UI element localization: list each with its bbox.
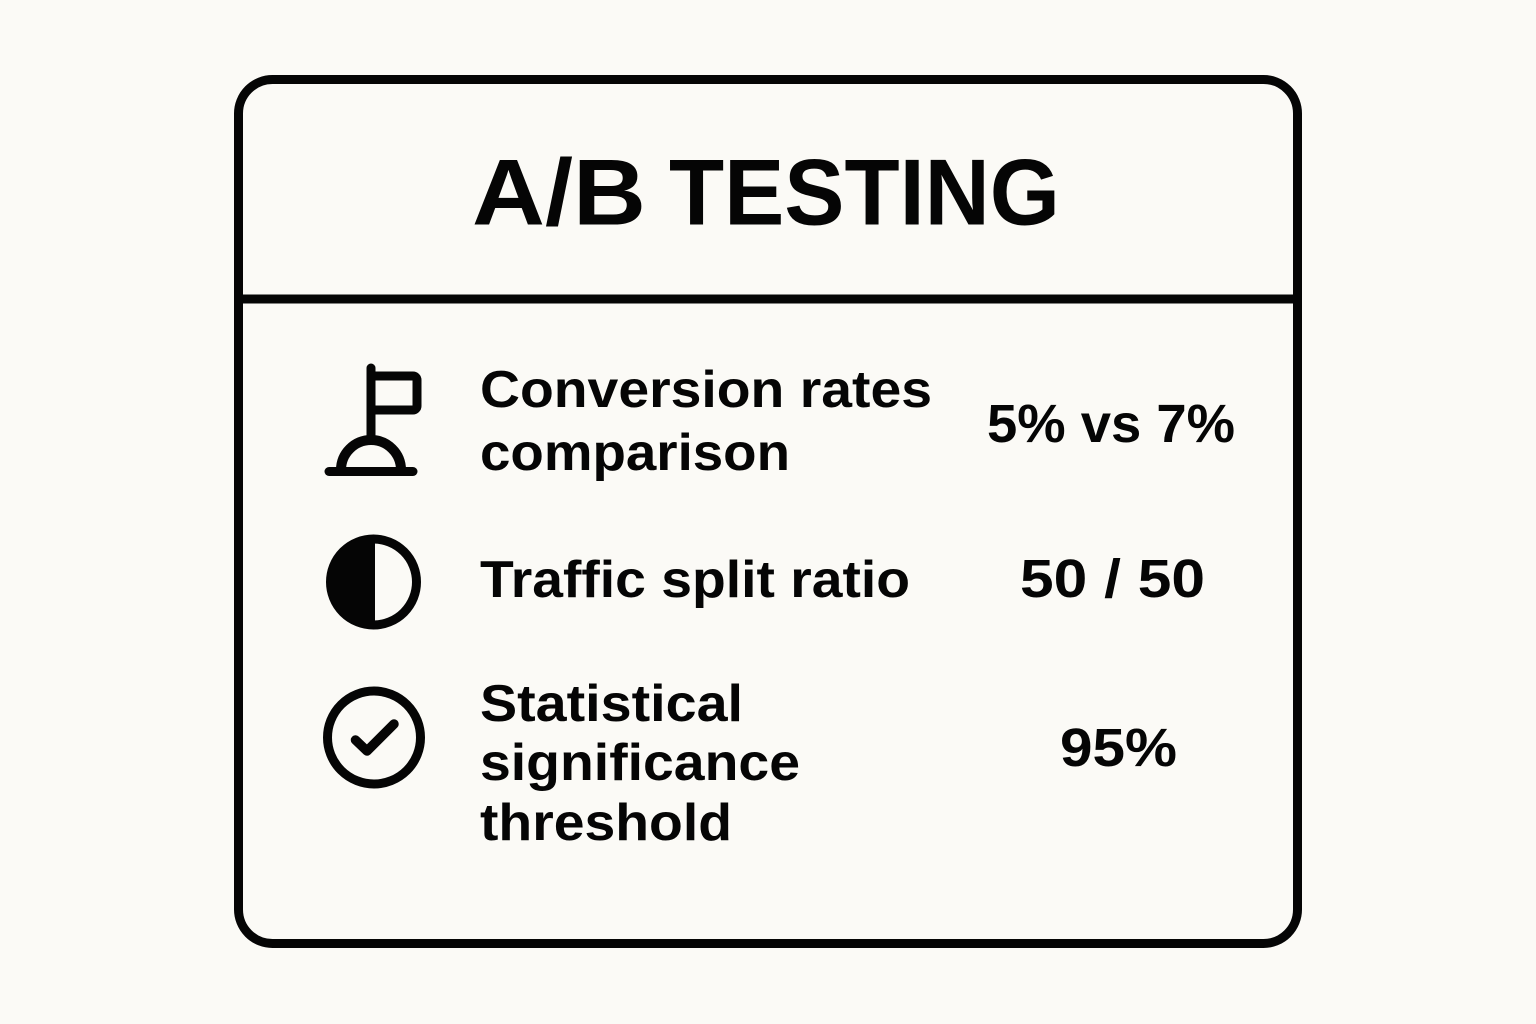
row label: statistical significance threshold [480,675,800,852]
row label: statistical significance threshold: threshold [480,794,732,852]
icon: half-filled circle [328,535,416,629]
row label: statistical significance threshold: Statistical [480,675,743,733]
row label: statistical significance threshold: significance [480,734,800,792]
row label: conversion rates comparison [480,361,932,482]
title: TESTING [669,140,1060,244]
row label: conversion rates comparison: Conversion rates [480,361,932,419]
icon: flag on mound [329,368,417,472]
row label: conversion rates comparison: comparison [480,424,790,482]
value: significance threshold: 95% [1060,718,1177,778]
value: conversion rates: 5% vs 7% [987,394,1235,454]
value: traffic split: 50 / 50 [1020,549,1205,609]
panel: A/B testing card [238,80,1298,944]
icon: check mark in circle [328,691,420,784]
row label: traffic split ratio: Traffic split ratio [480,551,910,609]
title: A/B [472,140,646,244]
